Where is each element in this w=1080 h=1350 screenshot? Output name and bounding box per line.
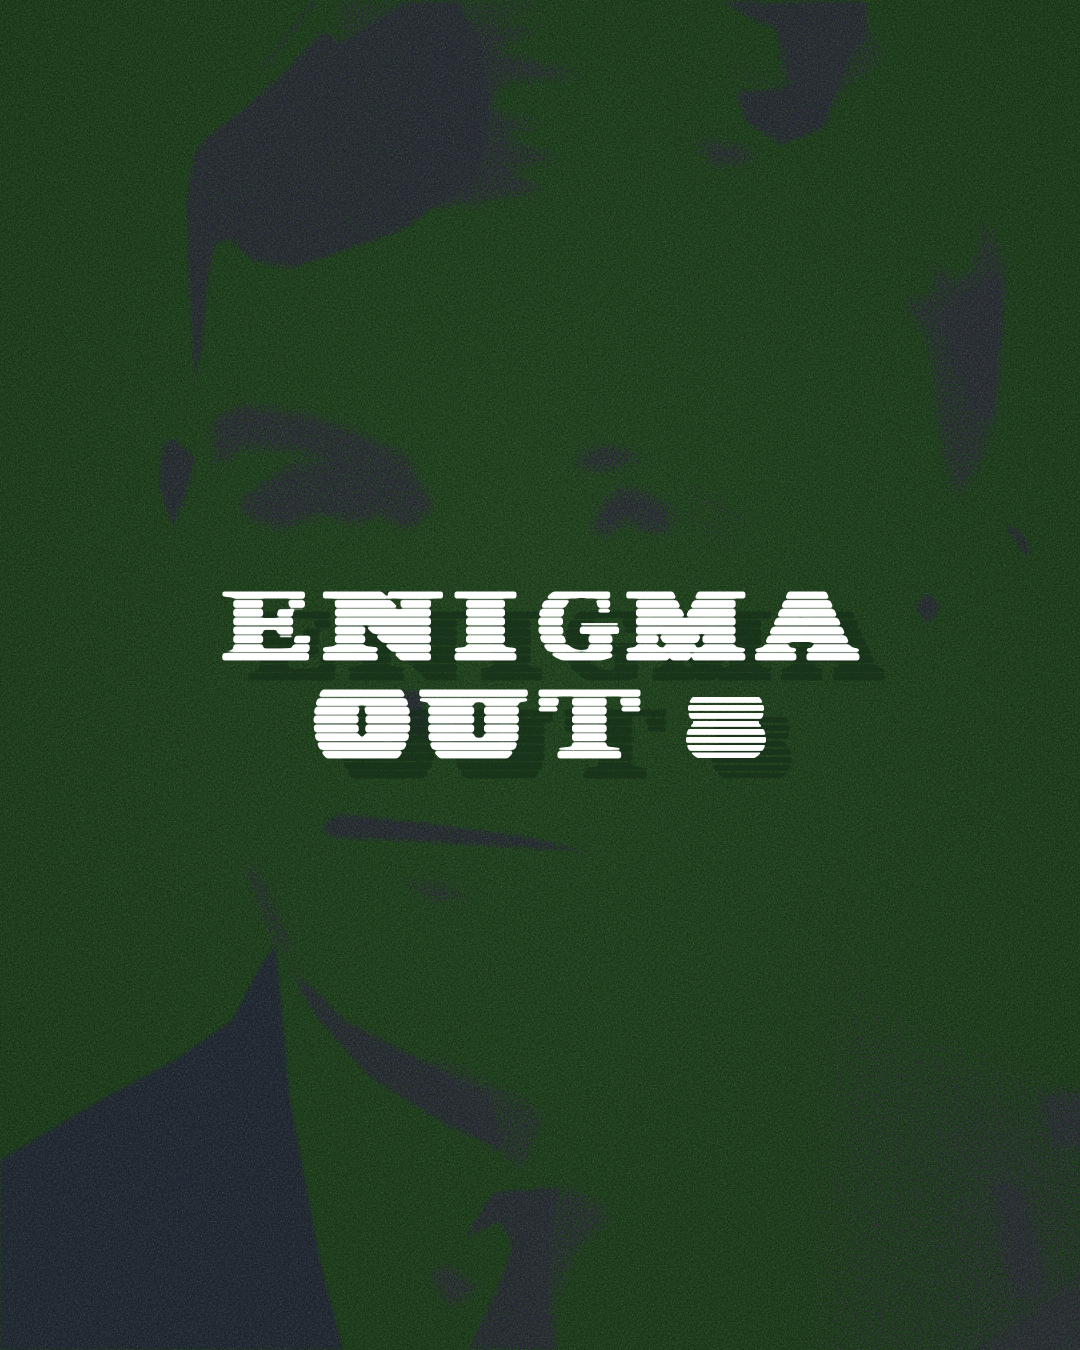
portrait: tie fuzz: [426, 1186, 614, 1350]
portrait: hair top right: [717, 0, 867, 146]
portrait: jacket lapel: [0, 945, 343, 1350]
title: striped lettering: [225, 564, 852, 779]
portrait: chin shadow: [243, 866, 478, 950]
portrait: hair top right fuzz: [690, 20, 885, 168]
portrait: left eyebrow and eye: [210, 404, 436, 532]
portrait: hair: [186, 0, 490, 392]
portrait: right ear shadow core: [935, 270, 1002, 420]
portrait: right eye: [590, 484, 748, 547]
portrait: left ear: [158, 436, 196, 530]
portrait: tie: [462, 1186, 560, 1350]
portrait: right eyebrow: [575, 443, 648, 472]
portrait: right shoulder dark folds: [965, 1090, 1080, 1350]
portrait: collar shadow: [292, 975, 505, 1150]
portrait: hair fringe: [335, 0, 590, 210]
portrait: neck shadow marks: [395, 522, 1034, 738]
portrait: mouth line: [320, 813, 602, 853]
portrait: right ear shadow fuzz: [900, 217, 1006, 502]
title shadow: [251, 584, 878, 799]
portrait: collar shadow fuzz: [282, 950, 545, 1172]
portrait: right shoulder diffuse shading: [815, 900, 1080, 1350]
